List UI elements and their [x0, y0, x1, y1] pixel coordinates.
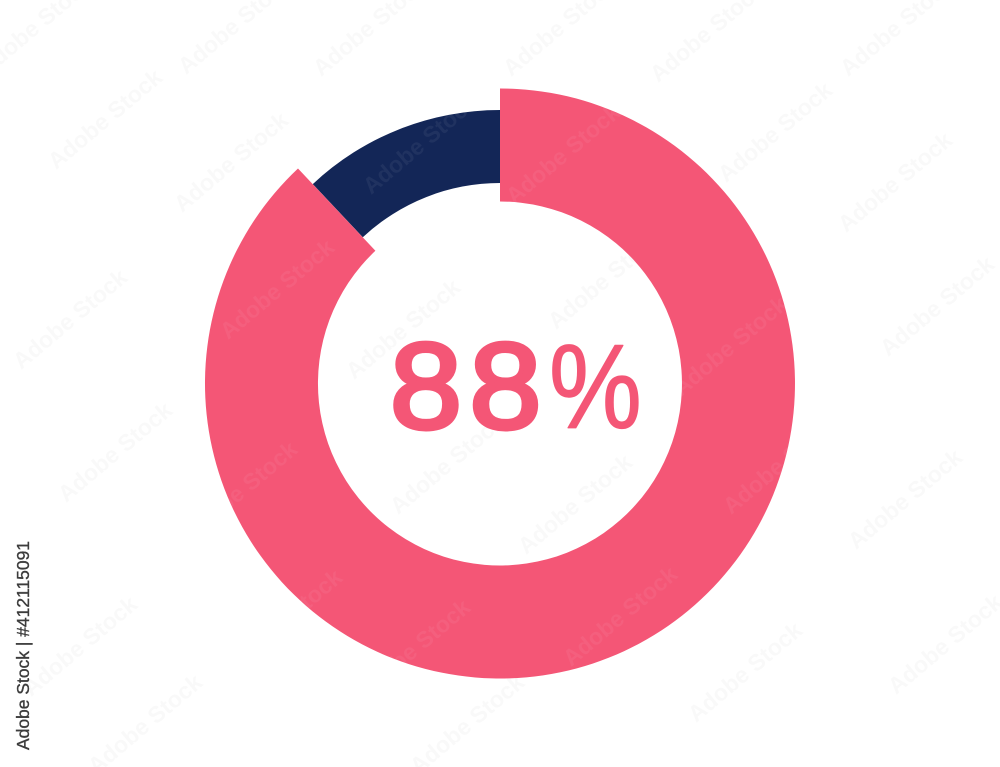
watermark pattern over donut ring: Adobe Stock	[358, 89, 482, 199]
watermark pattern on white background: Adobe Stock	[713, 77, 837, 187]
watermark pattern on white background: Adobe Stock	[683, 617, 807, 727]
percentage label: 88%: 88	[390, 317, 541, 454]
donut chart	[205, 88, 795, 678]
watermark pattern on white background: Adobe Stock	[385, 409, 509, 519]
watermark pattern over donut ring: Adobe Stock	[558, 561, 682, 671]
watermark pattern on white background: Adobe Stock	[543, 224, 667, 334]
watermark pattern on white background: Adobe Stock	[833, 127, 957, 237]
percentage label: 88%: %	[549, 319, 642, 454]
watermark pattern on white background: Adobe Stock	[341, 274, 465, 384]
watermark pattern over donut ring: Adobe Stock	[215, 234, 339, 344]
watermark pattern over donut ring	[178, 89, 842, 704]
watermark pattern over donut ring: Adobe Stock	[351, 594, 475, 704]
watermark pattern over donut ring: Adobe Stock	[223, 564, 347, 674]
watermark pattern on white background: Adobe Stock	[513, 449, 637, 559]
segment: navy 12% arc	[313, 110, 500, 237]
watermark pattern on white background: Adobe Stock	[43, 64, 167, 174]
watermark pattern over donut ring: Adobe Stock	[178, 436, 302, 546]
watermark pattern on white background: Adobe Stock	[18, 591, 142, 701]
stock image credit: Adobe Stock | #412115091	[13, 541, 33, 750]
watermark pattern on white background: Adobe Stock	[169, 107, 293, 217]
percentage label: 88%	[390, 317, 642, 454]
watermark pattern on white background: Adobe Stock	[8, 264, 132, 374]
watermark pattern over donut ring: Adobe Stock	[501, 99, 625, 209]
segment: pink 88% arc	[205, 88, 795, 678]
watermark pattern over donut ring: Adobe Stock	[668, 291, 792, 401]
watermark pattern on white background: Adobe Stock	[843, 444, 967, 554]
watermark pattern on white background: Adobe Stock	[53, 397, 177, 507]
watermark pattern over donut ring: Adobe Stock	[718, 409, 842, 519]
watermark pattern on white background: Adobe Stock	[875, 251, 999, 361]
